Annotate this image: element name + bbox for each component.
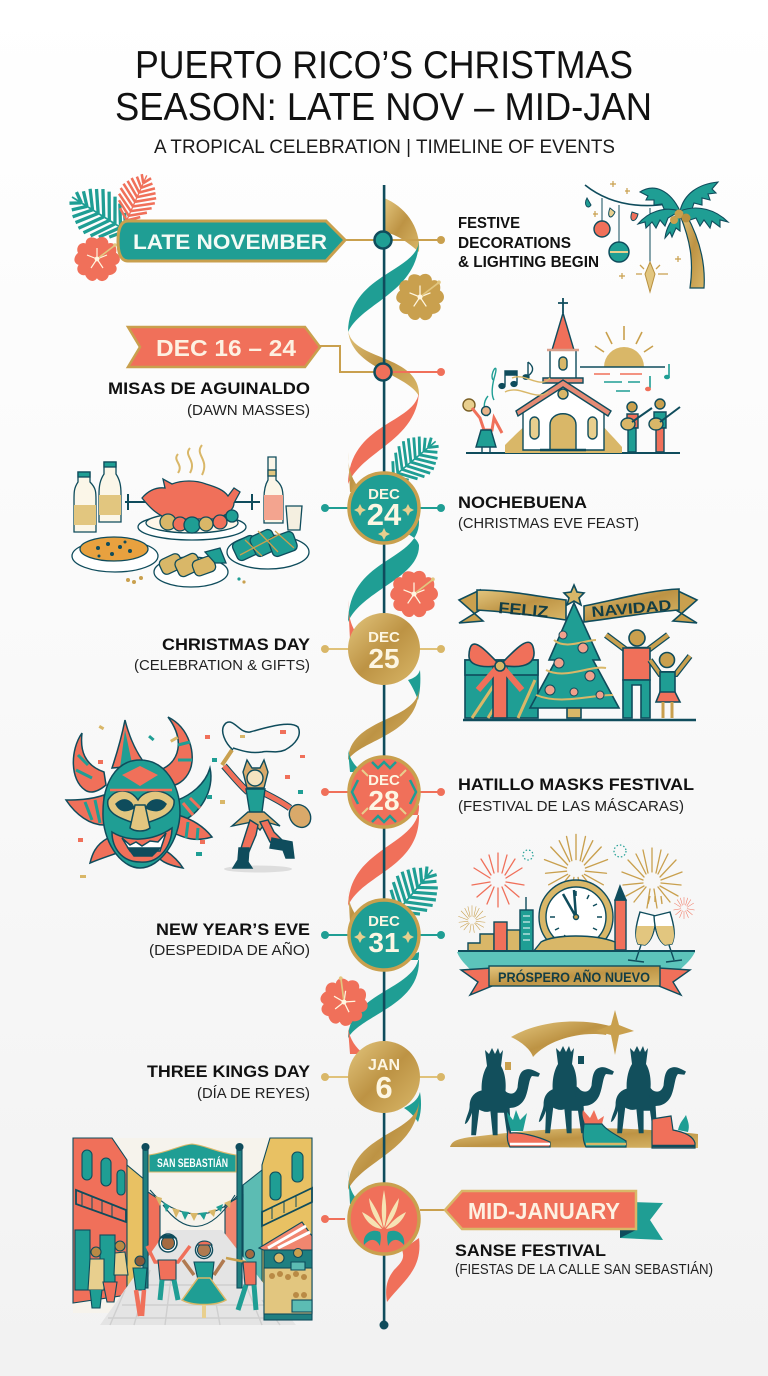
badge: mid-january festival <box>349 1184 419 1254</box>
illustration: new year's eve skyline <box>457 834 695 995</box>
text: sanse festival: (FIESTAS DE LA CALLE SAN SEBASTIÁN) <box>455 1261 713 1278</box>
text: hatillo masks festival: HATILLO MASKS FESTIVAL <box>458 775 694 794</box>
badge: dec 25 <box>348 613 420 685</box>
node: late november <box>374 232 392 248</box>
badge: dec 28: 28 <box>368 785 400 816</box>
badge: jan 6: JAN <box>368 1057 400 1074</box>
text: nochebuena: NOCHEBUENA <box>458 493 587 512</box>
text: festive decorations: & LIGHTING BEGIN <box>458 254 599 271</box>
text: hatillo masks festival <box>458 775 694 815</box>
badge: jan 6: 6 <box>375 1070 393 1105</box>
text: christmas day <box>134 635 311 674</box>
text: new year's eve: NEW YEAR’S EVE <box>156 920 310 939</box>
text: new year's eve <box>149 920 310 959</box>
illustration: san sebastián street <box>73 1138 312 1325</box>
text: christmas day: (CELEBRATION & GIFTS) <box>134 657 310 674</box>
pill: late november <box>118 221 345 261</box>
text: misas de aguinaldo: MISAS DE AGUINALDO <box>108 379 310 398</box>
badge: dec 25: 25 <box>368 643 400 674</box>
badge: dec 24: DEC <box>368 486 400 503</box>
tropical decorations on timeline <box>311 274 450 1037</box>
badge: dec 31 <box>349 900 419 970</box>
text: misas de aguinaldo: (DAWN MASSES) <box>187 402 310 419</box>
subtitle: A TROPICAL CELEBRATION | TIMELINE OF EVENTS <box>154 137 615 158</box>
text: nochebuena: (CHRISTMAS EVE FEAST) <box>458 515 639 532</box>
text: three kings day: THREE KINGS DAY <box>147 1062 311 1081</box>
text: nochebuena <box>458 493 639 532</box>
illustration: church with musicians <box>463 298 680 453</box>
pill: late november: LATE NOVEMBER <box>133 231 327 254</box>
text: new year's eve: (DESPEDIDA DE AÑO) <box>149 942 310 959</box>
text: hatillo masks festival: (FESTIVAL DE LAS MÁSCARAS) <box>458 798 684 815</box>
illustration: vejigante mask <box>66 717 305 878</box>
illustration: vejigante dancer with whip <box>222 722 315 872</box>
badge: dec 31: DEC <box>368 913 400 930</box>
illustration: nochebuena feast <box>72 445 309 587</box>
banner: dec 16-24: DEC 16 – 24 <box>156 335 296 361</box>
illustration: feliz navidad: NAVIDAD <box>591 597 672 621</box>
text: three kings day: (DÍA DE REYES) <box>197 1085 310 1102</box>
text: festive decorations: FESTIVE <box>458 215 520 232</box>
text: festive decorations <box>458 215 599 271</box>
text: misas de aguinaldo <box>108 379 310 419</box>
illustration: feliz navidad <box>459 585 697 720</box>
badge: dec 25: DEC <box>368 629 400 646</box>
badge: dec 24 <box>349 473 419 543</box>
illustration: new year's eve skyline: PRÓSPERO AÑO NUEVO <box>498 968 650 985</box>
leaves and hibiscus: late november <box>59 168 164 284</box>
title: PUERTO RICO’S CHRISTMAS <box>135 44 633 87</box>
illustration: three kings <box>450 1010 698 1148</box>
badge: dec 31: 31 <box>368 927 400 958</box>
illustration: san sebastián street: SAN SEBASTIÁN <box>157 1155 228 1170</box>
illustration: string lights and palm <box>585 181 728 292</box>
text: christmas day: CHRISTMAS DAY <box>162 635 311 654</box>
banner: dec 16-24 <box>128 327 320 367</box>
timeline axis <box>380 185 388 1330</box>
text: three kings day <box>147 1062 311 1102</box>
illustration: feliz navidad: FELIZ <box>498 600 549 621</box>
banner: mid-january: MID-JANUARY <box>468 1198 620 1224</box>
title: SEASON: LATE NOV – MID-JAN <box>115 86 652 129</box>
connector lines and dots <box>320 236 446 1223</box>
badge: jan 6 <box>348 1041 420 1113</box>
title <box>115 44 652 129</box>
text: sanse festival: SANSE FESTIVAL <box>455 1241 606 1260</box>
badge: dec 28 <box>349 757 419 827</box>
node: dec 16-24 <box>374 364 392 380</box>
badge: dec 28: DEC <box>368 772 400 789</box>
text: sanse festival <box>455 1241 713 1278</box>
text: festive decorations: DECORATIONS <box>458 235 571 252</box>
badge: dec 24: 24 <box>367 497 402 532</box>
twisted ribbons <box>348 198 421 1302</box>
banner: mid-january <box>445 1191 663 1240</box>
